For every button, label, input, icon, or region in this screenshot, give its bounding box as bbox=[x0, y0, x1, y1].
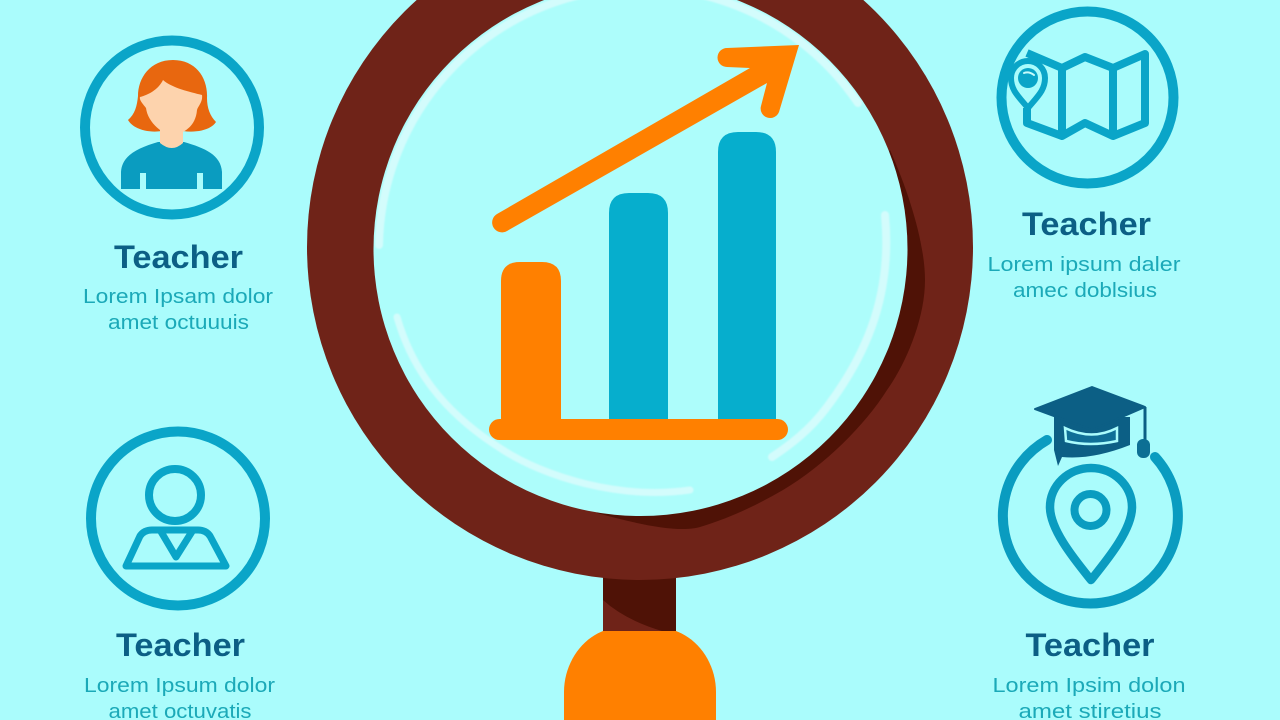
heading: Teacher bbox=[116, 627, 245, 663]
icon: location pin with graduation cap bbox=[1003, 387, 1178, 603]
icon: map with pin bbox=[1002, 12, 1174, 184]
panel: top-left teacher bbox=[83, 40, 273, 334]
growth arrow bbox=[492, 45, 799, 232]
handle grip bbox=[564, 631, 716, 720]
panel: top-right teacher bbox=[988, 12, 1181, 302]
heading: Teacher bbox=[1026, 627, 1154, 663]
icon: person outline bbox=[91, 432, 265, 606]
heading: Teacher bbox=[114, 239, 243, 275]
body bbox=[121, 142, 222, 189]
handle neck bbox=[603, 578, 676, 631]
description: Lorem ipsum daler bbox=[988, 254, 1181, 276]
magnifying glass bbox=[307, 0, 973, 720]
ring inner shadow bbox=[597, 150, 925, 529]
description: amec doblsius bbox=[1013, 280, 1157, 302]
panel: bottom-left teacher bbox=[84, 432, 275, 720]
bar chart with rising arrow bbox=[489, 45, 799, 440]
graduation cap bbox=[1035, 387, 1150, 466]
chart baseline bbox=[489, 419, 788, 440]
description bbox=[84, 675, 275, 720]
bar: short orange bbox=[501, 262, 561, 425]
description bbox=[992, 675, 1186, 720]
panel: bottom-right teacher bbox=[992, 387, 1186, 720]
icon: woman avatar bbox=[85, 40, 259, 214]
lens highlights bbox=[379, 0, 886, 492]
hair bbox=[128, 60, 216, 132]
description: Lorem Ipsum dolor bbox=[84, 675, 275, 697]
bar: tall teal bbox=[718, 132, 776, 425]
description: amet octuuuis bbox=[108, 312, 249, 334]
description bbox=[83, 286, 273, 334]
bar: medium teal bbox=[609, 193, 668, 425]
description: Lorem Ipsim dolon bbox=[992, 675, 1186, 697]
lens ring bbox=[307, 0, 973, 580]
description bbox=[988, 254, 1181, 302]
description: Lorem Ipsam dolor bbox=[83, 286, 273, 308]
heading: Teacher bbox=[1022, 206, 1151, 242]
face and neck bbox=[140, 80, 202, 148]
lens glass bbox=[374, 0, 908, 516]
